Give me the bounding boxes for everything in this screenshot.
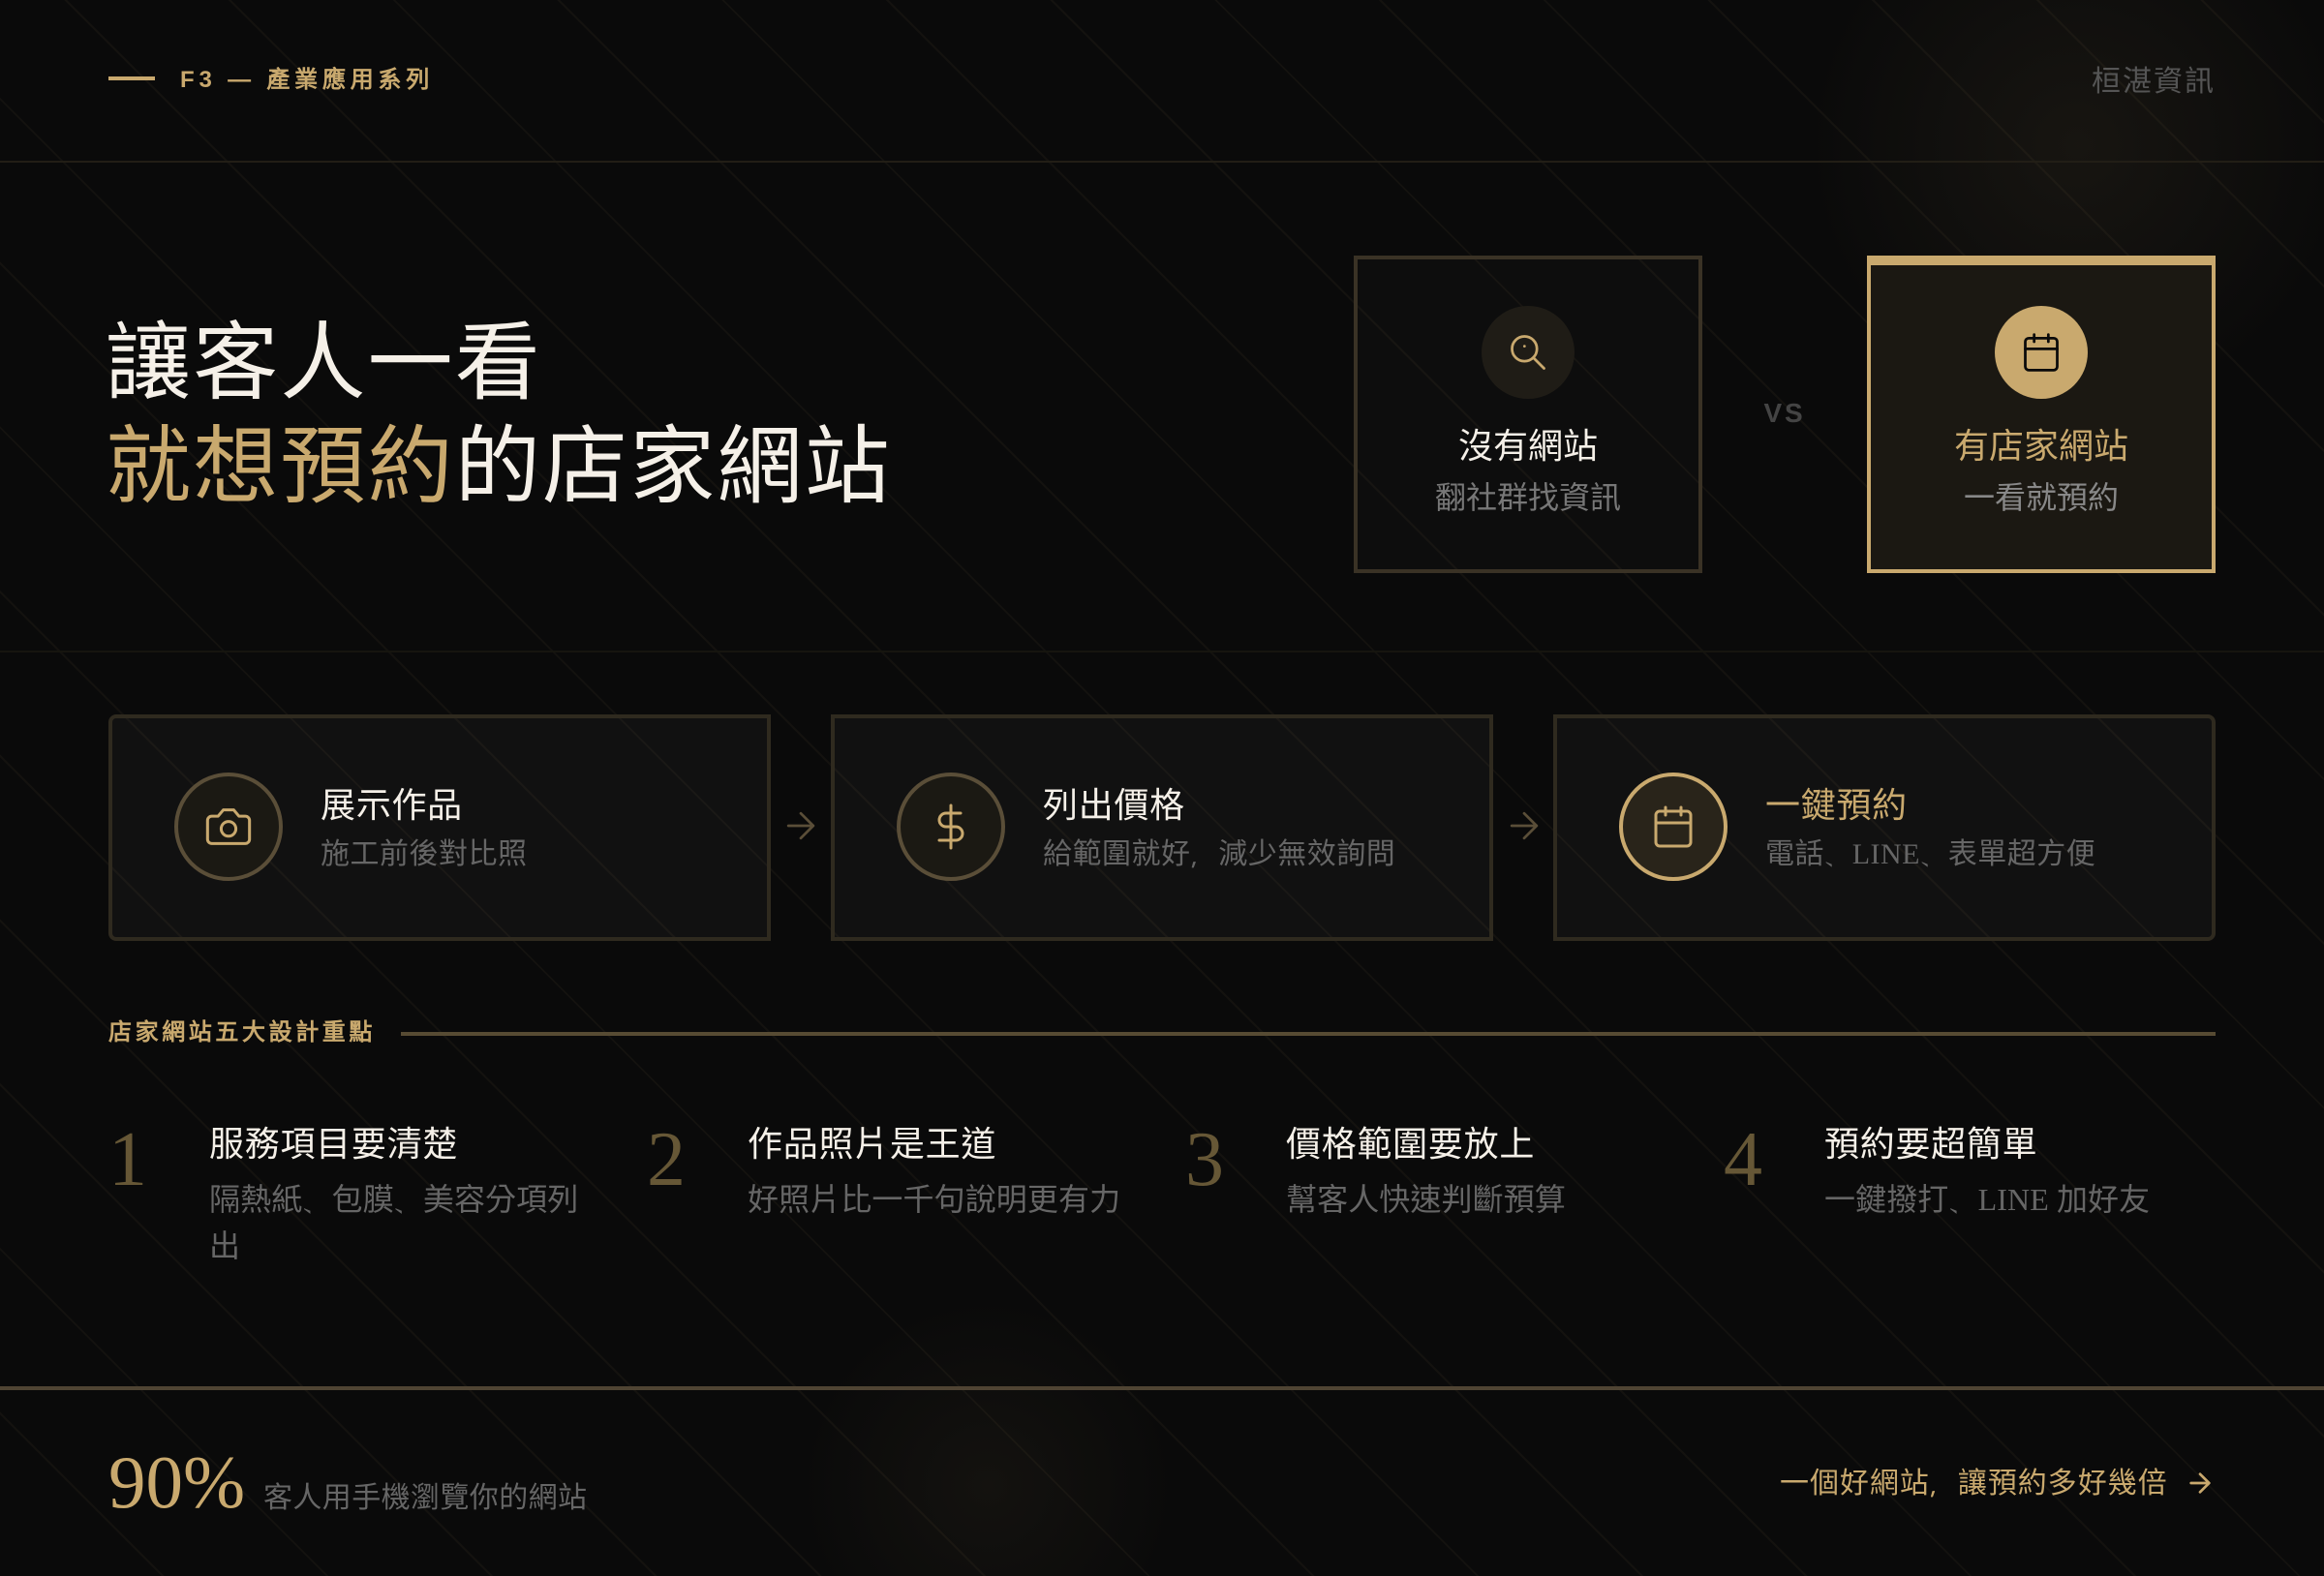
icon: search: [1482, 306, 1575, 399]
icon: calendar: [1995, 306, 2088, 399]
hero title: 就想預約的店家網站: [106, 421, 892, 515]
header: [0, 0, 2324, 163]
number: 3: [1185, 1117, 1224, 1202]
section rule: [401, 1032, 2216, 1036]
series label: F3 — 產業應用系列: [180, 67, 434, 93]
label: 沒有網站: [1458, 427, 1598, 466]
title: 服務項目要清楚: [209, 1125, 458, 1164]
icon: dollar: [897, 773, 1005, 881]
icon: calendar: [1619, 773, 1728, 881]
title: 價格範圍要放上: [1286, 1125, 1535, 1164]
description: 好照片比一千句說明更有力: [748, 1182, 1120, 1217]
step 2 description: 給範圍就好，減少無效詢問: [1043, 838, 1395, 870]
number: 2: [647, 1117, 686, 1202]
panel: without website: [1354, 256, 1702, 573]
title: 預約要超簡單: [1824, 1125, 2037, 1164]
design point 4: [1724, 1117, 2150, 1217]
top accent bar: [1867, 256, 2216, 265]
step 1 description: 施工前後對比照: [321, 838, 527, 870]
number: 1: [108, 1117, 147, 1202]
statistic label: 客人用手機瀏覽你的網站: [263, 1482, 587, 1514]
section heading: 店家網站五大設計重點: [108, 1019, 376, 1046]
call to action: 一個好網站，讓預約多好幾倍: [1780, 1468, 2168, 1500]
design point 2: [647, 1117, 1120, 1217]
arrow: [1511, 811, 1538, 840]
description: 隔熱紙、包膜、美容分項列出: [209, 1182, 578, 1263]
statistic: 90%: [108, 1440, 245, 1524]
arrow: [2189, 1472, 2211, 1494]
step 3 title: 一鍵預約: [1765, 786, 1908, 825]
description: 一鍵撥打、LINE 加好友: [1824, 1182, 2150, 1217]
design point 3: [1185, 1117, 1566, 1217]
description: 幫客人快速判斷預算: [1286, 1182, 1566, 1217]
title: 作品照片是王道: [748, 1125, 996, 1164]
step 1 title: 展示作品: [321, 786, 463, 825]
step 2 title: 列出價格: [1043, 786, 1185, 825]
panel: step 3: [1553, 714, 2216, 941]
sublabel: 一看就預約: [1964, 480, 2119, 515]
panel: step 1: [108, 714, 771, 941]
sublabel: 翻社群找資訊: [1435, 480, 1621, 515]
panel: step 2: [831, 714, 1493, 941]
footer: [0, 1386, 2324, 1576]
icon: camera: [174, 773, 283, 881]
label: 有店家網站: [1954, 427, 2128, 466]
arrow: [786, 811, 815, 840]
design point 1: [108, 1117, 578, 1263]
number: 4: [1724, 1117, 1762, 1202]
step 3 description: 電話、LINE、表單超方便: [1765, 838, 2095, 870]
hero divider: [0, 651, 2324, 652]
hero title: 讓客人一看: [106, 318, 542, 411]
vs label: VS: [1764, 398, 1805, 428]
header accent line: [108, 76, 155, 80]
brand name: 桓湛資訊: [2092, 66, 2216, 98]
hero title: [106, 318, 892, 515]
panel: with website: [1867, 256, 2216, 573]
